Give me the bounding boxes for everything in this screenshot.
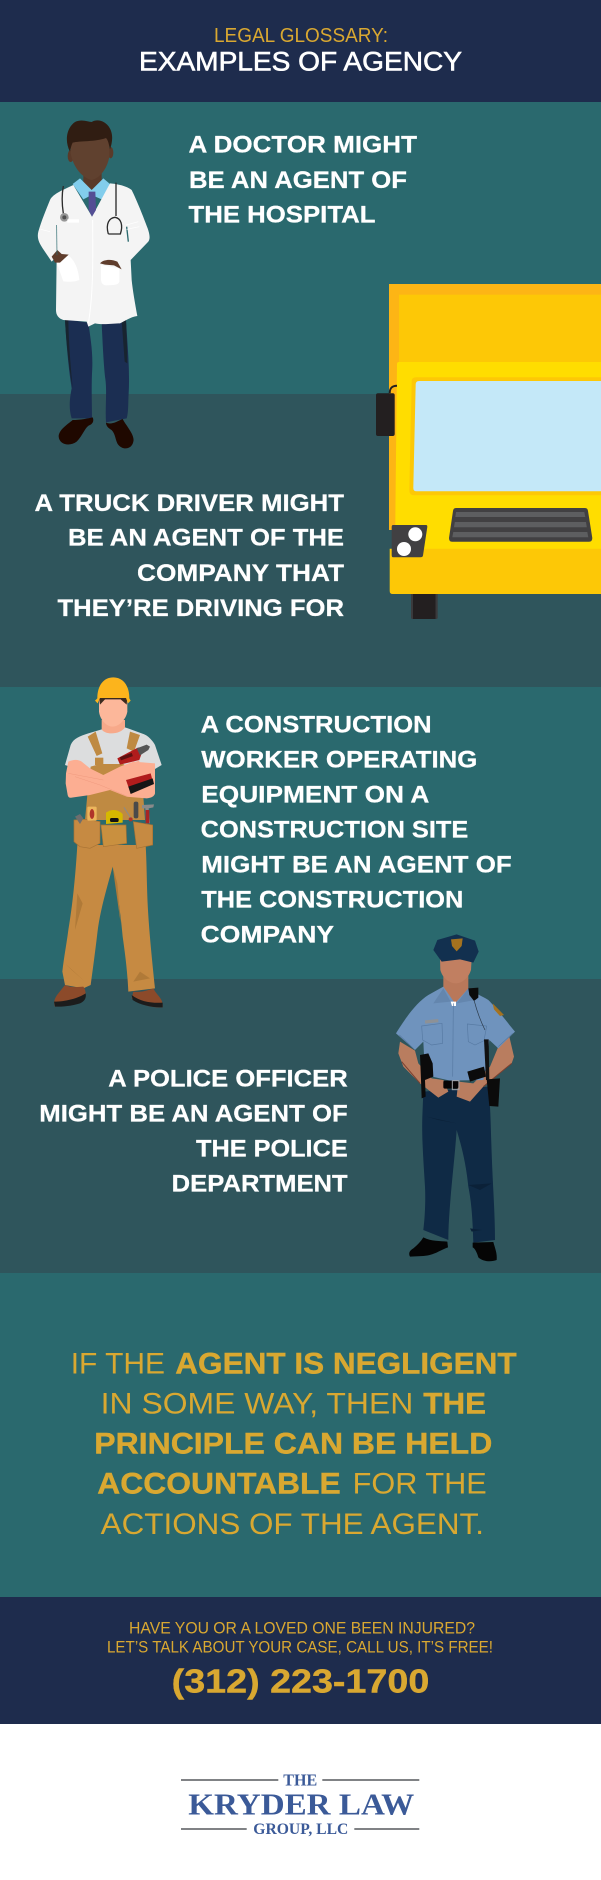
truck driver text: A TRUCK DRIVER MIGHT — [34, 490, 344, 517]
doctor text — [188, 132, 417, 229]
negligence statement: ACTIONS OF THE AGENT. — [101, 1508, 484, 1541]
construction worker text: MIGHT BE AN AGENT OF — [201, 852, 512, 879]
call to action text: LET’S TALK ABOUT YOUR CASE, CALL US, IT’S FREE! — [107, 1638, 493, 1656]
header banner — [0, 0, 601, 102]
construction worker illustration — [54, 677, 163, 1007]
call to action text — [107, 1619, 493, 1656]
worker drill — [117, 745, 154, 794]
negligence statement: IF THE — [71, 1347, 165, 1380]
police officer text: DEPARTMENT — [172, 1171, 348, 1198]
law firm logo — [181, 1770, 419, 1838]
truck driver text: THEY’RE DRIVING FOR — [58, 595, 344, 622]
construction worker text: COMPANY — [201, 922, 334, 949]
police officer illustration — [396, 934, 515, 1261]
police gear — [420, 988, 500, 1107]
police officer text: A POLICE OFFICER — [108, 1066, 348, 1093]
negligence statement — [71, 1347, 517, 1541]
negligence statement: FOR THE — [353, 1468, 487, 1501]
construction worker text: THE CONSTRUCTION — [201, 887, 463, 914]
negligence statement: IN SOME WAY, THEN — [101, 1387, 413, 1420]
phone number: (312) 223-1700 — [172, 1664, 429, 1701]
negligence statement: AGENT IS NEGLIGENT — [175, 1347, 517, 1380]
police arms — [398, 1037, 514, 1102]
law firm logo: KRYDER LAW — [188, 1787, 414, 1822]
police officer text: THE POLICE — [196, 1136, 348, 1163]
negligence statement: THE — [423, 1387, 486, 1420]
school bus / truck front illustration — [376, 284, 601, 619]
construction worker text: EQUIPMENT ON A — [201, 782, 429, 809]
header subtitle: LEGAL GLOSSARY: — [214, 25, 388, 47]
law firm logo: GROUP, LLC — [253, 1821, 348, 1838]
worker tool belt — [74, 802, 154, 848]
law firm logo: THE — [283, 1770, 317, 1789]
police officer text: MIGHT BE AN AGENT OF — [39, 1101, 348, 1128]
doctor text: THE HOSPITAL — [188, 202, 376, 229]
construction worker text: CONSTRUCTION SITE — [201, 817, 468, 844]
truck driver text: BE AN AGENT OF THE — [68, 525, 344, 552]
bus grille — [449, 508, 592, 542]
doctor illustration — [38, 120, 150, 448]
truck driver text — [34, 490, 344, 622]
doctor text: A DOCTOR MIGHT — [188, 132, 417, 159]
bus headlight — [392, 525, 427, 557]
header title: EXAMPLES OF AGENCY — [139, 47, 462, 77]
truck driver text: COMPANY THAT — [137, 560, 344, 587]
negligence statement: PRINCIPLE CAN BE HELD — [94, 1428, 492, 1461]
call to action banner — [0, 1597, 601, 1724]
doctor text: BE AN AGENT OF — [189, 167, 407, 194]
construction worker text — [201, 712, 512, 949]
construction worker text: WORKER OPERATING — [201, 747, 477, 774]
police officer text — [39, 1066, 348, 1198]
call to action text: HAVE YOU OR A LOVED ONE BEEN INJURED? — [129, 1619, 475, 1637]
construction worker text: A CONSTRUCTION — [201, 712, 432, 739]
bus mirror — [376, 386, 397, 436]
negligence statement: ACCOUNTABLE — [97, 1468, 341, 1501]
